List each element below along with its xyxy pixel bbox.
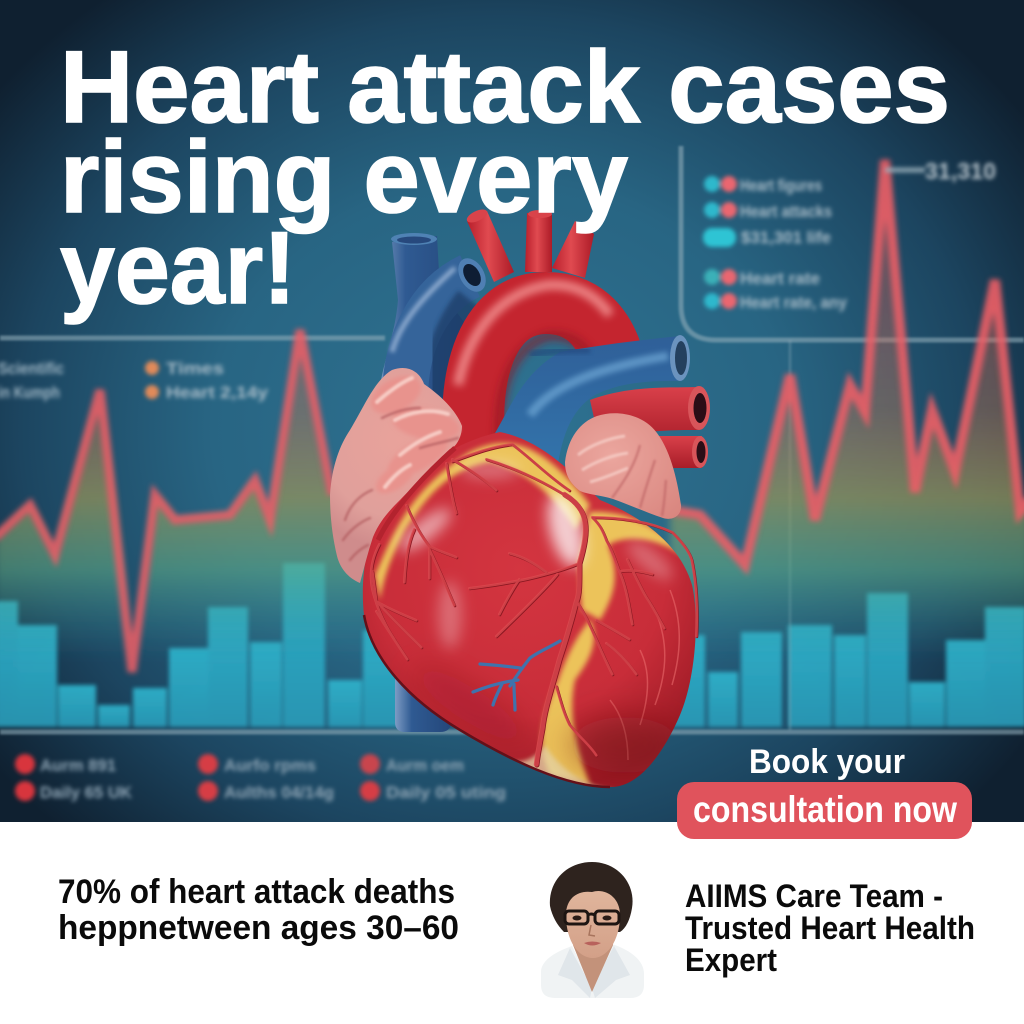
face — [566, 891, 620, 958]
white footer panel — [0, 822, 1024, 1024]
blurred legend: bottom row: Aulths 04/14g — [224, 783, 334, 802]
dark lower edge — [364, 615, 610, 787]
background chart: left trend area and red line — [0, 330, 400, 672]
call to action button label: consultation now — [693, 789, 957, 830]
blurred legend: bottom row — [15, 754, 506, 802]
call to action button — [677, 782, 972, 839]
statistic text: 70% of heart attack deaths — [58, 873, 455, 911]
white coat — [541, 944, 644, 998]
pulmonary artery — [488, 335, 690, 480]
right atrium (viewer right) — [565, 413, 681, 519]
glasses — [565, 911, 619, 924]
ventricles — [363, 432, 698, 795]
call to action lead text: Book your — [749, 743, 905, 781]
background chart: right trend area and red line — [670, 160, 1024, 660]
red pulmonary veins — [590, 386, 710, 468]
eyes — [572, 916, 612, 920]
expert caption: AIIMS Care Team - — [685, 878, 943, 914]
aortic arch — [458, 285, 612, 480]
blurred legend: upper right: 31,310 — [925, 158, 996, 184]
neck — [573, 935, 613, 992]
coronary arteries — [371, 444, 698, 765]
blurred legend: bottom row: Daily 65 UK — [40, 783, 133, 802]
title: rising every — [60, 120, 628, 234]
blurred legend: bottom row: Aurm oem — [386, 756, 464, 775]
dark lower shading — [402, 654, 680, 773]
blurred legend: middle left: Scientific — [0, 359, 64, 378]
title — [60, 30, 950, 325]
mouth — [584, 942, 601, 946]
blurred legend: bottom row: Aurm 891 — [40, 756, 116, 775]
blurred legend: middle left: Heart 2,14y — [166, 383, 269, 402]
blue branch vessel — [392, 253, 491, 400]
title: year! — [60, 211, 296, 325]
statistic text — [58, 873, 459, 947]
superior vena cava — [378, 233, 470, 440]
call to action — [677, 743, 972, 839]
coat lapels — [558, 946, 630, 998]
blurred legend: bottom row: Aurfo rpms — [224, 756, 316, 775]
inferior vena cava — [395, 640, 451, 732]
muscle striations — [610, 590, 679, 760]
blurred legend: middle left — [0, 359, 269, 402]
hair back — [550, 862, 633, 932]
cream lower rim — [516, 744, 612, 787]
blurred legend: upper right — [703, 158, 996, 312]
expert caption: Trusted Heart Health — [685, 910, 975, 946]
blurred legend: upper right: Heart attacks — [740, 202, 832, 221]
blurred legend: middle left: Times — [166, 359, 224, 378]
statistic text: heppnetween ages 30–60 — [58, 909, 459, 947]
expert caption: Expert — [685, 942, 777, 978]
background chart: teal bars — [0, 563, 1024, 727]
nose shadow — [589, 925, 595, 936]
blurred legend: upper right: $31,301 life — [741, 228, 831, 247]
blue coronary vein — [473, 641, 560, 710]
atrium red edge — [378, 448, 455, 540]
left atrium (viewer left) — [330, 368, 462, 583]
aortic branches — [465, 207, 594, 282]
yellow fat band — [375, 443, 690, 785]
expert caption — [685, 878, 975, 978]
glossy highlights — [394, 461, 678, 649]
background chart: grid frame lines — [0, 146, 1024, 732]
doctor portrait — [541, 862, 644, 998]
title: Heart attack cases — [60, 30, 950, 144]
blurred legend: upper right: Heart rate — [740, 269, 820, 288]
blurred legend: middle left: in Kumph — [0, 383, 60, 402]
blurred legend: upper right: Heart rate, any — [740, 293, 847, 312]
blurred legend: upper right: Heart figures — [740, 176, 822, 195]
blurred legend: bottom row: Daily 05 uting — [386, 783, 506, 802]
anatomical heart illustration — [330, 207, 710, 795]
